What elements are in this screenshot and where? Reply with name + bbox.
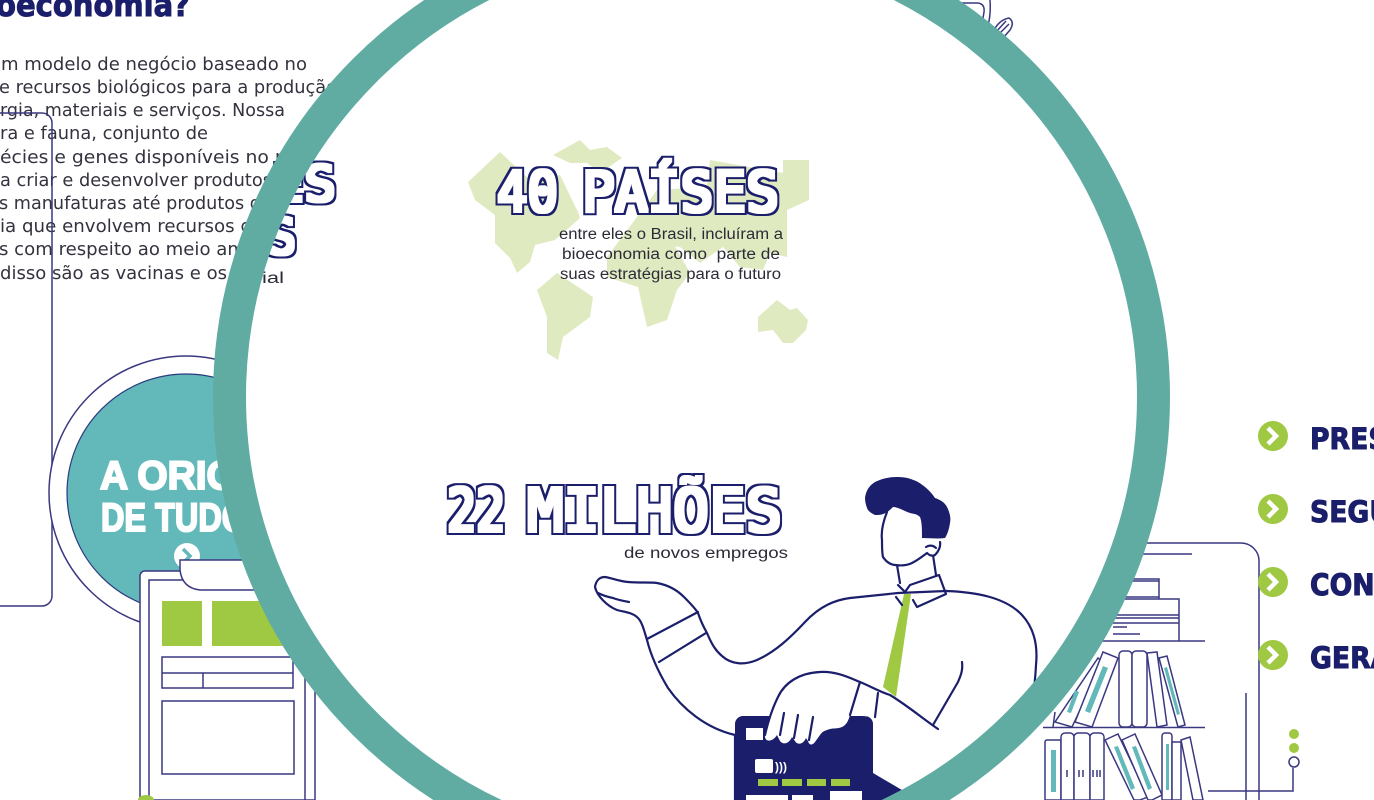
sleeve behind card	[873, 773, 902, 800]
text block: bioeconomy definition: disso são as vacinas e os	[0, 264, 227, 284]
hand and forearm	[764, 716, 868, 744]
text block: bioeconomy definition: ra e fauna, conjunto de	[0, 124, 208, 144]
text block: bioeconomy definition: ia que envolvem recursos g	[0, 217, 252, 237]
text block: bioeconomy definition: s manufaturas até produtos d	[0, 194, 261, 214]
partial outlined stat showing through ring: S	[268, 209, 296, 266]
rounded text frame	[0, 113, 52, 606]
partial outlined stat showing through ring: ES	[272, 156, 336, 213]
stat: 22 milhões: MILHÕES	[527, 476, 782, 545]
list: benefits	[1258, 421, 1374, 675]
stat description: suas estratégias para o futuro	[560, 266, 781, 283]
icon: chevron geração	[1258, 640, 1288, 670]
stat: 40 países: 40	[497, 160, 558, 224]
stat: 22 milhões	[447, 476, 788, 562]
text block: bioeconomy definition	[0, 55, 337, 284]
neck	[897, 555, 936, 583]
stat description: de novos empregos	[624, 545, 788, 562]
illustration: man holding card	[595, 477, 1036, 800]
partial outlined stat showing through ring	[262, 156, 336, 287]
stat description	[559, 226, 783, 283]
collar	[896, 575, 946, 607]
text block: bioeconomy definition: rgia, materiais e serviços. Nossa	[0, 101, 285, 121]
world map	[468, 140, 809, 360]
inner torso line	[933, 662, 962, 725]
ring	[230, 0, 1154, 800]
stat: 40 países: PAÍSES	[582, 160, 779, 224]
text block: bioeconomy definition: s com respeito ao meio am	[0, 240, 245, 260]
partial outlined stat showing through ring: ial	[262, 270, 284, 287]
stat description: entre eles o Brasil, incluíram a	[559, 226, 783, 243]
stat: 22 milhões: 22	[447, 476, 505, 545]
icon: chevron conservação	[1258, 567, 1288, 597]
text block: bioeconomy definition: écies e genes disponíveis no pl	[0, 148, 292, 168]
badge: a origem de tudo: DE TUDO	[101, 496, 247, 540]
illustration: bookshelf tablet	[1043, 543, 1299, 800]
text block: bioeconomy definition: e recursos biológicos para a produção	[0, 78, 337, 98]
text block: bioeconomy definition: m modelo de negócio baseado no	[1, 55, 307, 75]
icon: chevron segurança	[1258, 494, 1288, 524]
stat description: bioeconomia como parte de	[562, 246, 780, 263]
illustration: top decoration	[955, 0, 1012, 38]
head	[865, 477, 950, 565]
badge: a origem de tudo: A ORIGEM	[100, 454, 295, 498]
badge: a origem de tudo	[49, 356, 323, 630]
payment card	[735, 716, 873, 800]
circle interior	[246, 0, 1138, 800]
shirt and arm	[595, 577, 1036, 800]
icon: chevron preservação	[1258, 421, 1288, 451]
stat: 40 países	[497, 160, 783, 283]
tie	[883, 594, 911, 697]
text block: bioeconomy definition: a criar e desenvolver produtos	[0, 171, 272, 191]
payment card: )))	[775, 760, 787, 774]
illustration: clipboard document	[138, 560, 315, 800]
